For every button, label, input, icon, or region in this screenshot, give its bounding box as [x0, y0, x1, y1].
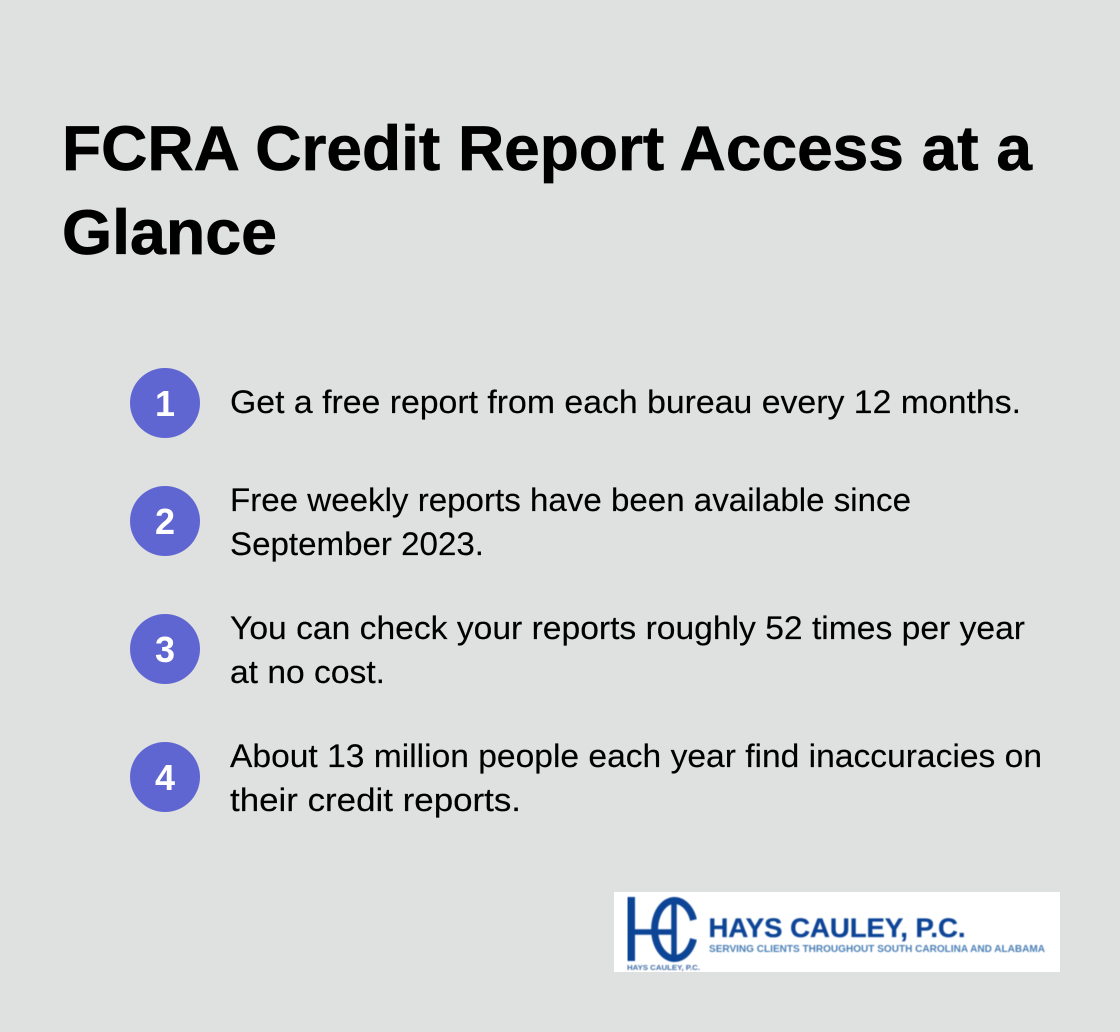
number badge 1 — [130, 368, 200, 438]
item 4 text: About 13 million people each year find inaccuracies on — [230, 738, 1042, 774]
number badge 4 — [130, 742, 200, 812]
item 1 text: Get a free report from each bureau every 12 months. — [230, 384, 1021, 420]
logo — [614, 892, 1060, 972]
number badge 1: 1 — [155, 383, 175, 424]
number badge 2: 2 — [155, 501, 175, 542]
number badge 2 — [130, 486, 200, 556]
item 2 text — [230, 482, 911, 562]
title: FCRA Credit Report Access at a — [62, 114, 1033, 184]
item 3 text: You can check your reports roughly 52 times per year — [230, 610, 1025, 646]
item 1 — [130, 368, 1021, 438]
title: Glance — [62, 198, 277, 268]
item 3 — [130, 610, 1025, 690]
logo firm name: HAYS CAULEY, P.C. — [708, 913, 966, 943]
item 4 — [130, 738, 1042, 818]
item 3 text — [230, 610, 1025, 690]
item 4 text — [230, 738, 1042, 818]
number badge 3 — [130, 614, 200, 684]
item 2 text: Free weekly reports have been available since — [230, 482, 911, 518]
number badge 4: 4 — [155, 757, 175, 798]
number badge 3: 3 — [155, 629, 175, 670]
logo mark: HC monogram — [631, 897, 694, 961]
item 2 — [130, 482, 911, 562]
title — [62, 114, 1033, 268]
item 4 text: their credit reports. — [230, 782, 521, 818]
logo small caption: HAYS CAULEY, P.C. — [627, 963, 700, 972]
item 3 text: at no cost. — [230, 654, 385, 690]
logo tagline: SERVING CLIENTS THROUGHOUT SOUTH CAROLINA AND ALABAMA — [709, 943, 1045, 955]
item 2 text: September 2023. — [230, 526, 484, 562]
